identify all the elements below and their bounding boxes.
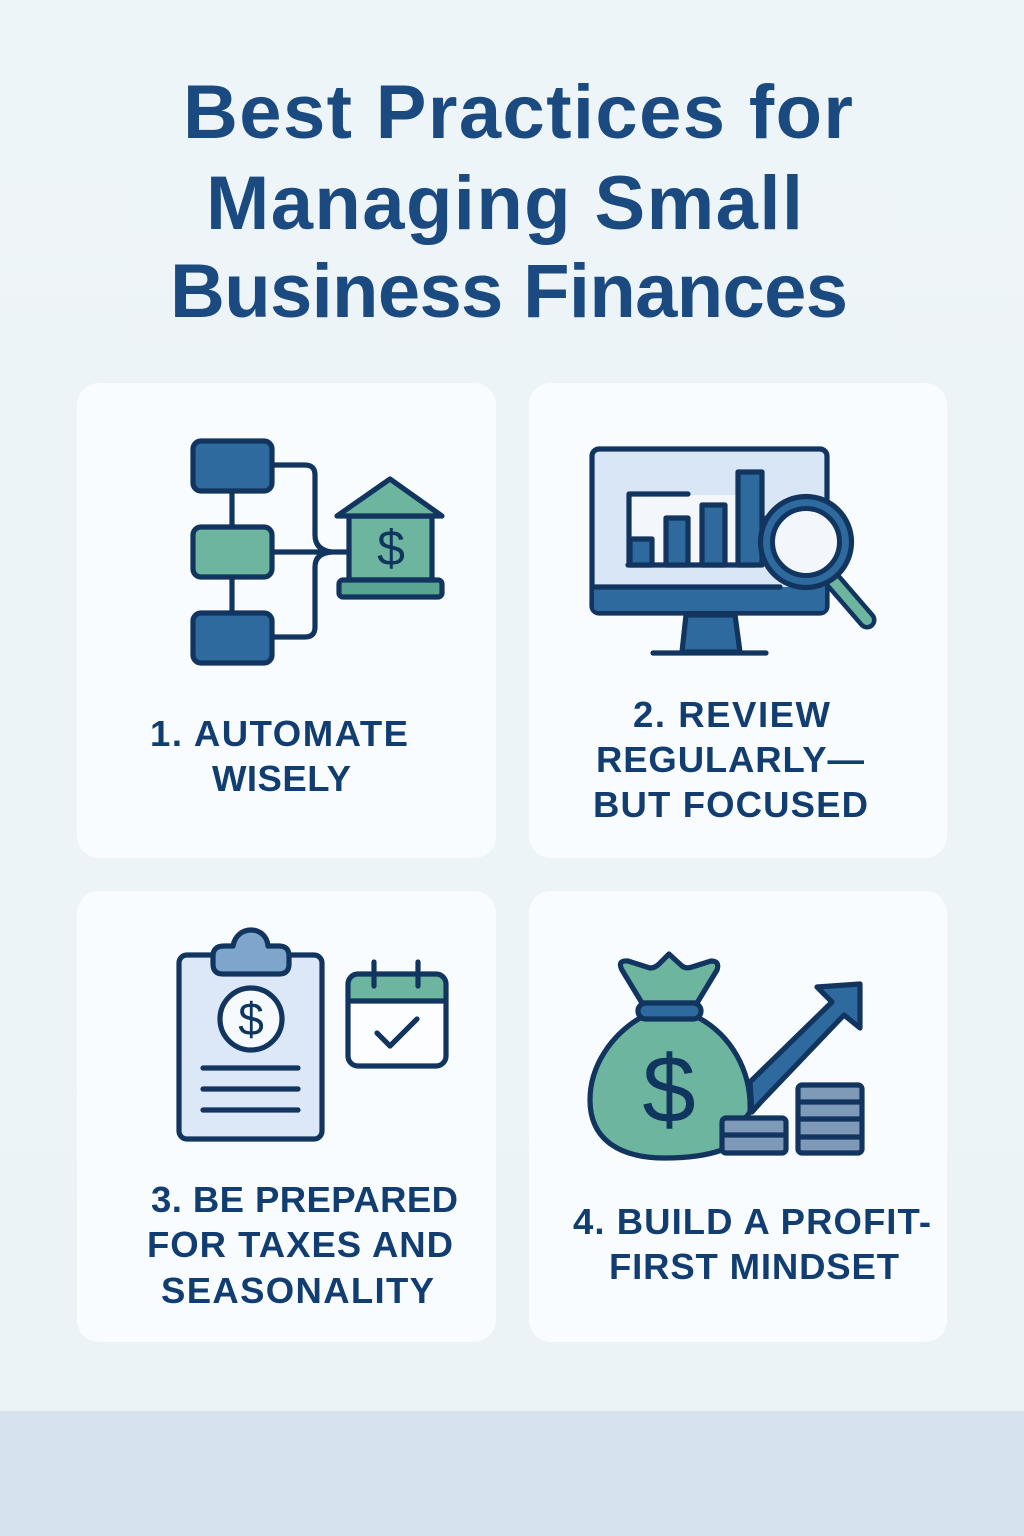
icon: automated workflow to bank (193, 441, 442, 663)
panel: review regularly (529, 383, 947, 858)
label 2: 2. REVIEW (633, 694, 831, 735)
label 3: SEASONALITY (161, 1270, 434, 1311)
label 2: BUT FOCUSED (593, 784, 868, 825)
icon: clipboard with dollar (179, 930, 322, 1139)
label 3: FOR TAXES AND (147, 1224, 453, 1265)
icon: calendar with check (348, 962, 446, 1066)
label 1 (150, 713, 408, 799)
label 1: 1. AUTOMATE (150, 713, 408, 754)
title: Managing Small (206, 161, 803, 246)
title (170, 70, 853, 334)
card background 4 (529, 891, 947, 1342)
card background 1 (77, 383, 496, 858)
icon: money bag, arrow and coin stacks (590, 954, 862, 1158)
panel: profit-first mindset (529, 891, 947, 1342)
label 2 (593, 694, 868, 825)
panel: automate wisely (77, 383, 496, 858)
panel: taxes and seasonality (77, 891, 496, 1342)
label 3 (147, 1179, 458, 1311)
card background 3 (77, 891, 496, 1342)
label 1: WISELY (212, 758, 351, 799)
label 4 (573, 1201, 931, 1287)
label 4: FIRST MINDSET (609, 1246, 899, 1287)
icon: automated workflow to bank: $ (377, 520, 405, 576)
label 4: 4. BUILD A PROFIT- (573, 1201, 931, 1242)
title: Business Finances (170, 249, 848, 334)
icon: clipboard with dollar: $ (238, 993, 264, 1045)
icon: monitor with chart and magnifier (592, 449, 867, 653)
card background 2 (529, 383, 947, 858)
label 3: 3. BE PREPARED (151, 1179, 458, 1220)
footer band (0, 1411, 1024, 1536)
title: Best Practices for (183, 70, 853, 155)
label 2: REGULARLY— (596, 739, 864, 780)
icon: money bag, arrow and coin stacks: $ (642, 1036, 696, 1143)
